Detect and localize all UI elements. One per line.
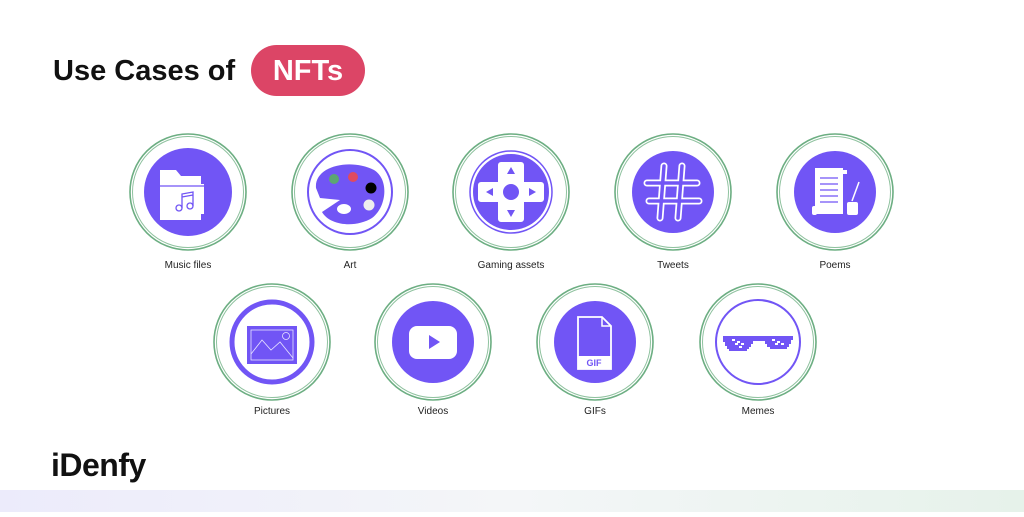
title: Use Cases of <box>53 55 235 87</box>
item: Gaming assets <box>453 134 569 271</box>
item: Poems: Poems <box>819 260 851 271</box>
item: Tweets <box>615 134 731 271</box>
item: Poems <box>777 134 893 271</box>
item: Art: Art <box>344 260 357 271</box>
item: Videos: Videos <box>418 406 448 417</box>
title <box>53 45 365 96</box>
bottom gradient band <box>0 490 1024 512</box>
item: Pictures: Pictures <box>254 406 290 417</box>
item: GIFs: GIFs <box>584 406 606 417</box>
item: GIFs: GIF <box>586 358 602 368</box>
item: Memes: Memes <box>742 406 774 417</box>
item: Videos <box>375 284 491 417</box>
item: Gaming assets: Gaming assets <box>478 260 544 271</box>
title pill: NFTs: NFTs <box>273 55 343 87</box>
item: GIFs <box>537 284 653 417</box>
item: Memes <box>700 284 816 417</box>
item: Tweets: Tweets <box>657 260 689 271</box>
item: Music files: Music files <box>165 260 211 271</box>
item: Art <box>292 134 408 271</box>
item: Music files <box>130 134 246 271</box>
logo: iDenfy: iDenfy <box>51 447 146 483</box>
title pill: NFTs <box>251 45 365 96</box>
item: Pictures <box>214 284 330 417</box>
